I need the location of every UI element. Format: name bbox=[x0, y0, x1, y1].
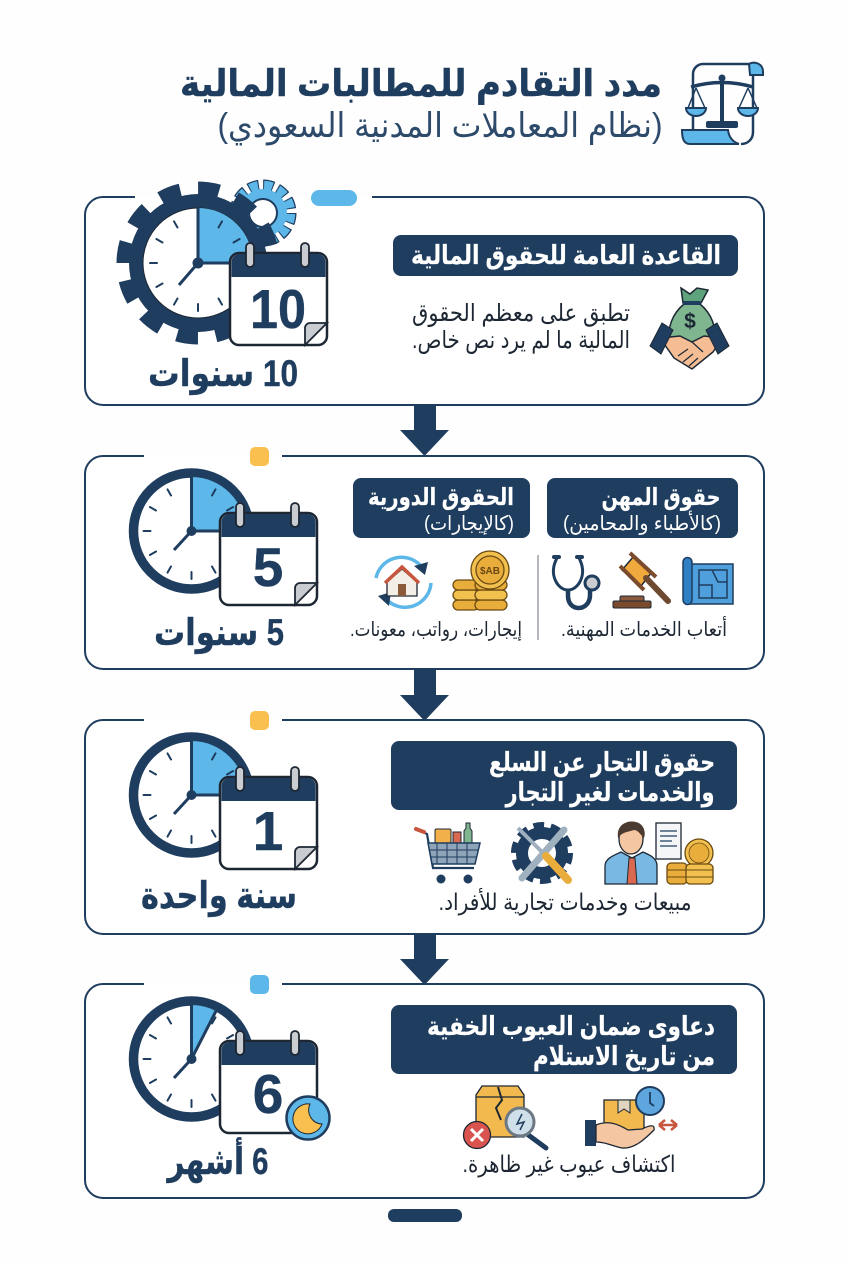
icon: blueprint bbox=[683, 558, 733, 604]
calendar number: 6 bbox=[253, 1063, 283, 1125]
heading bar: دعاوى ضمان العيوب الخفية bbox=[427, 1011, 715, 1042]
heading bar: القاعدة العامة للحقوق المالية bbox=[411, 240, 721, 271]
panel: hidden defects, 6 months bbox=[85, 975, 764, 1198]
duration label: سنة واحدة bbox=[141, 875, 297, 917]
body text bbox=[412, 300, 630, 354]
icon: clock with calendar bbox=[134, 737, 317, 869]
calendar number: 1 bbox=[253, 800, 283, 862]
caption: professional fees: أتعاب الخدمات المهنية. bbox=[561, 616, 727, 641]
heading bar bbox=[393, 235, 738, 276]
arrow: panel 3 to 4 bbox=[400, 934, 449, 985]
icon: gavel bbox=[613, 553, 668, 608]
duration label: 10 سنوات bbox=[148, 353, 298, 395]
caption: مبيعات وخدمات تجارية للأفراد. bbox=[438, 888, 692, 916]
footer pill bbox=[388, 1209, 462, 1222]
icon: shopping cart bbox=[416, 823, 480, 884]
icon: hand holding box with clock bbox=[585, 1087, 677, 1148]
caption: اكتشاف عيوب غير ظاهرة. bbox=[462, 1151, 676, 1178]
icon: money bag and handshake: $ bbox=[684, 310, 696, 333]
duration label: 6 أشهر bbox=[166, 1137, 268, 1183]
panel: merchants, 1 year bbox=[85, 711, 764, 934]
panel: professions and periodic rights, 5 years bbox=[85, 447, 764, 669]
heading: periodic rights bbox=[353, 478, 530, 538]
arrow: panel 2 to 3 bbox=[400, 669, 449, 721]
caption: rents and salaries: إيجارات، رواتب، معونات. bbox=[350, 619, 522, 642]
icon: stack of coins: $AB bbox=[480, 566, 500, 577]
icon: businessman with invoice and coins bbox=[605, 822, 713, 884]
heading bar: والخدمات لغير التجار bbox=[504, 777, 714, 808]
heading: periodic rights: (كالإيجارات) bbox=[424, 513, 514, 535]
heading: professional rights: (كالأطباء والمحامين) bbox=[563, 511, 721, 535]
heading: periodic rights: الحقوق الدورية bbox=[368, 484, 514, 511]
arrow: panel 1 to 2 bbox=[400, 405, 449, 456]
icon: clock in gear with calendar bbox=[124, 186, 327, 345]
header icon: scales of justice on scroll bbox=[682, 63, 763, 144]
accent pill bbox=[250, 975, 269, 994]
heading bar bbox=[391, 741, 737, 810]
icon: clock with calendar bbox=[134, 473, 317, 605]
calendar number: 10 bbox=[250, 278, 306, 340]
icon: money bag and handshake bbox=[650, 288, 729, 369]
body text: المالية ما لم يرد نص خاص. bbox=[412, 327, 630, 354]
accent pill bbox=[311, 190, 357, 206]
icon: cracked box with magnifier bbox=[464, 1086, 546, 1148]
heading bar bbox=[391, 1005, 737, 1074]
heading bar: حقوق التجار عن السلع bbox=[489, 747, 715, 778]
icon: gear with tools bbox=[516, 827, 568, 880]
accent pill bbox=[250, 447, 269, 466]
icon: stack of coins bbox=[453, 551, 509, 610]
icon: house in cycle arrows bbox=[376, 557, 431, 607]
heading: professional rights bbox=[547, 478, 738, 538]
icon: stethoscope bbox=[553, 557, 599, 608]
panel: general rule, 10 years bbox=[85, 186, 764, 405]
heading bar: من تاريخ الاستلام bbox=[533, 1041, 715, 1072]
accent pill bbox=[250, 711, 269, 730]
duration label: 5 سنوات bbox=[154, 612, 284, 654]
body text: تطبق على معظم الحقوق bbox=[412, 300, 630, 327]
subtitle: (نظام المعاملات المدنية السعودي) bbox=[218, 107, 662, 146]
icon: clock with calendar and moon bbox=[134, 1001, 330, 1140]
heading: professional rights: حقوق المهن bbox=[602, 484, 720, 511]
calendar number: 5 bbox=[253, 536, 283, 598]
title: مدد التقادم للمطالبات المالية bbox=[180, 63, 662, 106]
